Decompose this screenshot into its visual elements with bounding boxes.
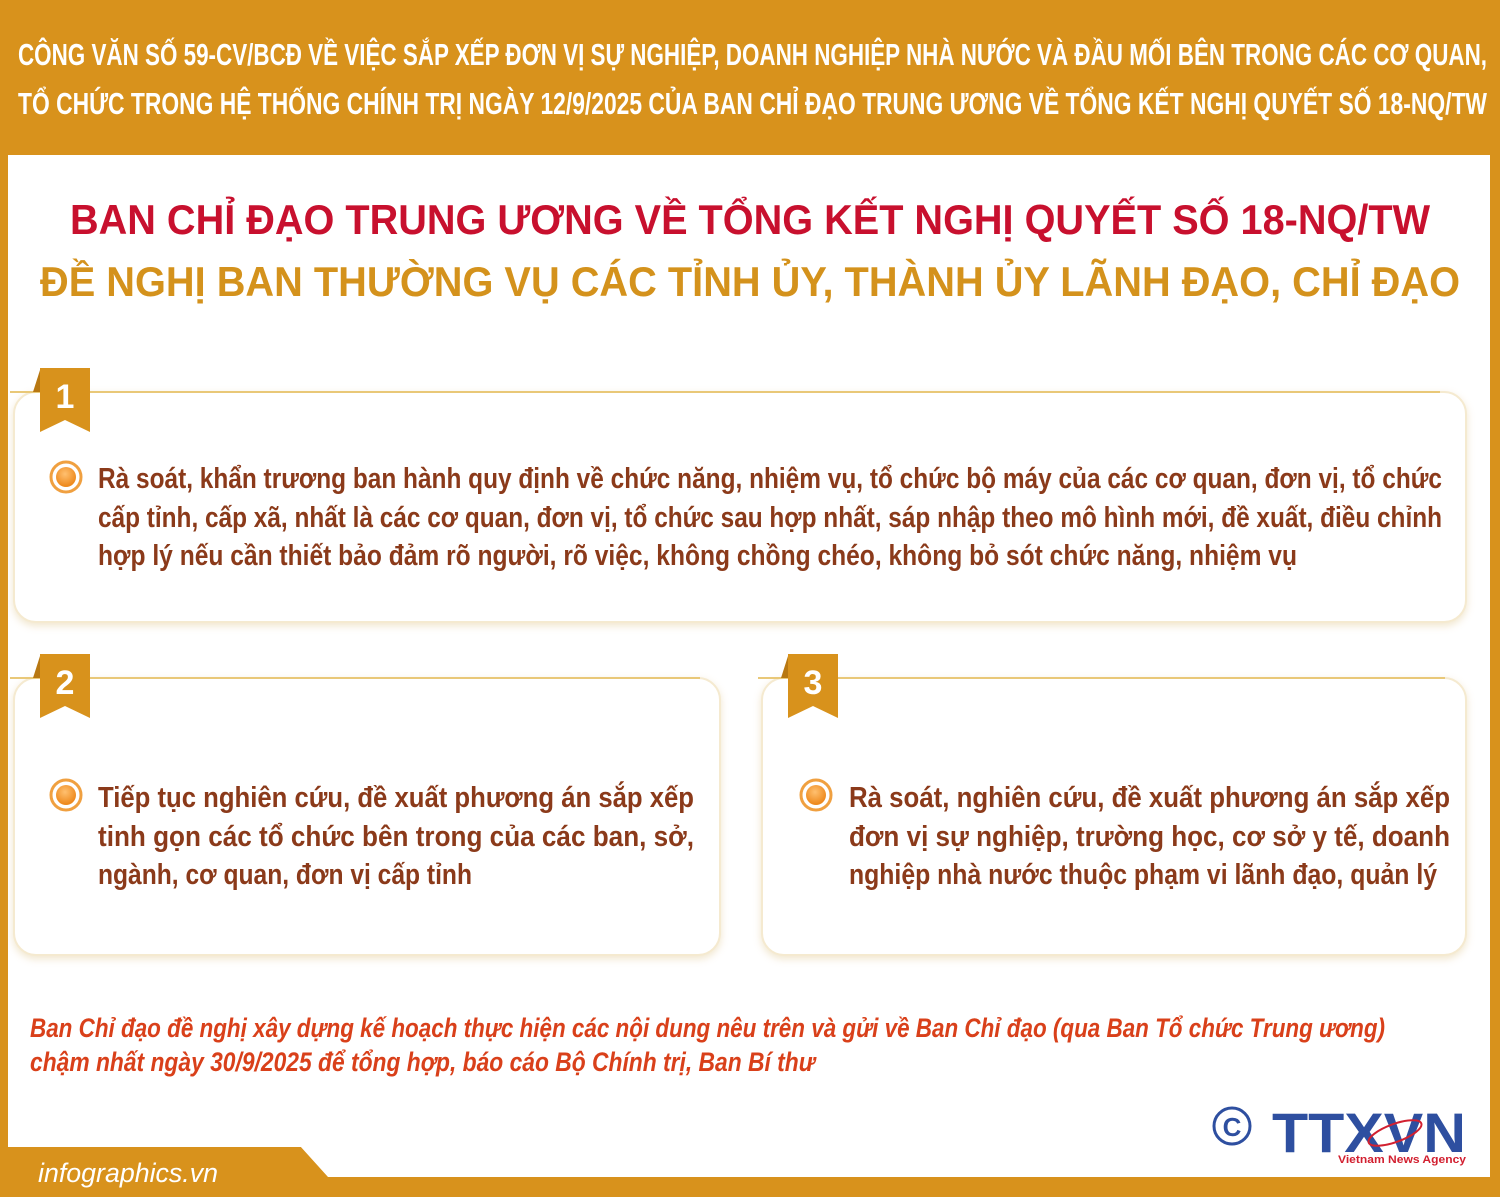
main heading: BAN CHỈ ĐẠO TRUNG ƯƠNG VỀ TỔNG KẾT NGHỊ QUYẾT SỐ 18-NQ/TW bbox=[70, 194, 1430, 243]
footer note: chậm nhất ngày 30/9/2025 để tổng hợp, báo cáo Bộ Chính trị, Ban Bí thư bbox=[30, 1047, 817, 1077]
panel 2 bbox=[10, 654, 720, 955]
badge 1: 1 bbox=[56, 378, 74, 416]
header title bbox=[18, 36, 1488, 121]
logo TTXVN: Vietnam News Agency bbox=[1338, 1154, 1467, 1166]
bullet 1 bbox=[51, 462, 81, 492]
panel 3 bbox=[758, 654, 1466, 955]
website label: infographics.vn bbox=[38, 1158, 218, 1188]
text 2: ngành, cơ quan, đơn vị cấp tỉnh bbox=[98, 859, 472, 891]
bullet 2 bbox=[51, 780, 81, 810]
main heading bbox=[40, 194, 1460, 305]
text 1: hợp lý nếu cần thiết bảo đảm rõ người, rõ việc, không chồng chéo, không bỏ sót chức năng, nhiệm vụ bbox=[98, 540, 1297, 572]
text 3 bbox=[849, 780, 1450, 891]
footer note bbox=[30, 1013, 1385, 1077]
text 2 bbox=[98, 780, 694, 891]
badge 2: 2 bbox=[56, 664, 74, 702]
text 3: đơn vị sự nghiệp, trường học, cơ sở y tế, doanh bbox=[849, 821, 1450, 853]
text 2: tinh gọn các tổ chức bên trong của các ban, sở, bbox=[98, 821, 694, 853]
logo TTXVN: TTXVN bbox=[1272, 1101, 1466, 1164]
logo TTXVN: C bbox=[1223, 1112, 1242, 1142]
badge 3 bbox=[781, 654, 838, 718]
badge 2 bbox=[33, 654, 90, 718]
badge 1 bbox=[33, 368, 90, 432]
text 1 bbox=[98, 463, 1442, 572]
panel 1 bbox=[10, 368, 1466, 622]
text 2: Tiếp tục nghiên cứu, đề xuất phương án sắp xếp bbox=[98, 780, 694, 814]
badge 3: 3 bbox=[804, 664, 822, 702]
main heading: ĐỀ NGHỊ BAN THƯỜNG VỤ CÁC TỈNH ỦY, THÀNH ỦY LÃNH ĐẠO, CHỈ ĐẠO bbox=[40, 257, 1460, 305]
bullet 3 bbox=[801, 780, 831, 810]
